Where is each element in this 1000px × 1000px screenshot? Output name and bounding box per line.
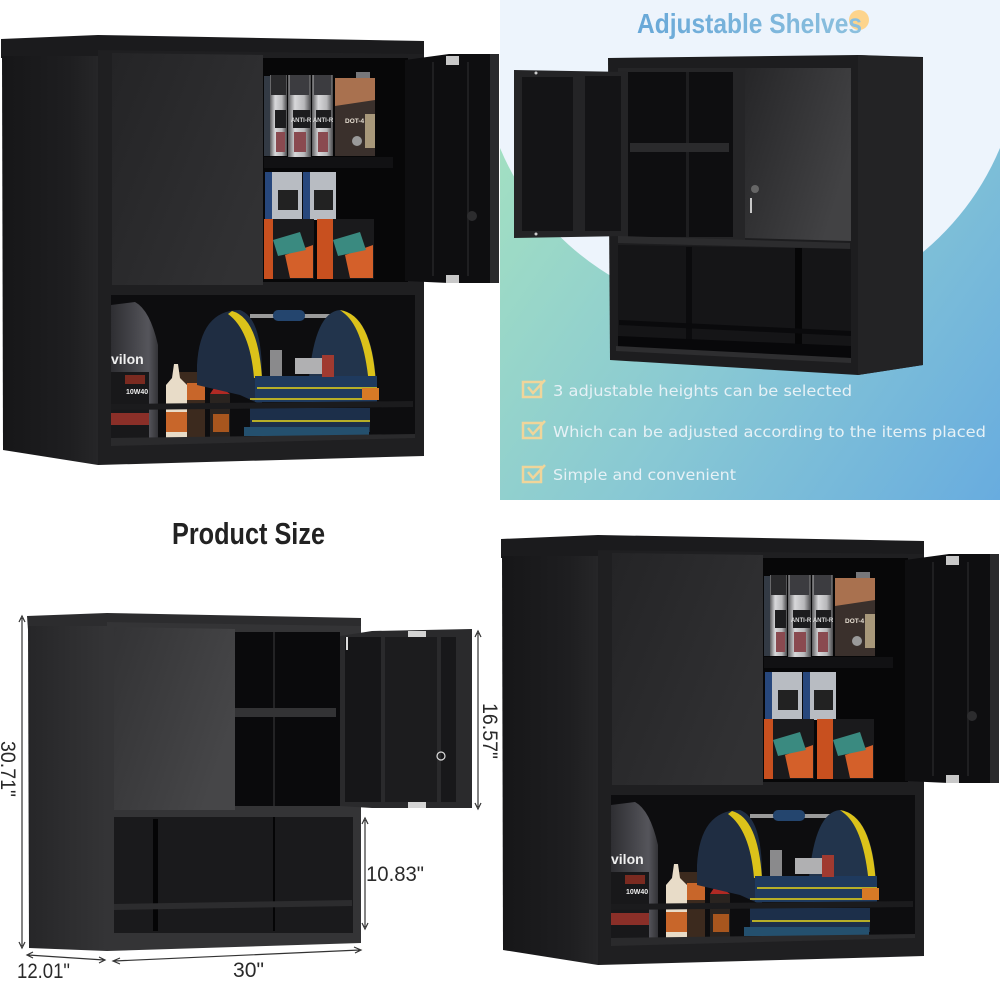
DOT-4 tin [835,572,875,656]
open upper interior [763,558,908,782]
panel: product photo with stored items, top left [1,35,499,465]
shelf [264,157,393,168]
spray cans: ANTI-R [313,118,334,124]
orange product boxes [264,219,374,279]
shelf [764,657,893,668]
spray cans: ANTI-R [291,118,312,124]
closed door [114,627,235,810]
DOT-4 tin: DOT-4 [845,618,865,625]
lower open compartment [611,795,915,938]
door lock and key [750,185,759,213]
dimension: compartment height 10.83 [362,818,424,929]
adjustable shelf [235,708,336,717]
tool bag [697,810,879,936]
dimension: depth 12.01 [17,952,105,983]
bullet 3: Simple and convenient [553,466,736,484]
front bar [114,900,352,910]
panel background [500,0,1000,500]
panel: product photo with stored items, bottom right [501,535,999,965]
small bottles [666,864,730,940]
spray cans [764,575,834,657]
spray cans: ANTI-R [791,618,812,624]
open door [340,629,472,808]
closed left door [612,553,763,785]
lower compartment [618,245,851,358]
upper shelf [630,143,729,152]
DOT-4 tin [335,72,375,156]
dimension: depth 12.01: 12.01" [17,960,70,983]
spray cans [264,75,334,157]
dimension: width 30: 30" [233,959,264,982]
stacked blue boxes [765,672,836,720]
pale circle backdrop [500,0,1000,314]
lower bar [619,320,851,336]
oil jug: 10W40 [126,389,148,396]
heading: product size: Product Size [172,516,325,551]
small bottles [166,364,230,440]
upper interior [235,632,340,806]
closed left door [112,53,263,285]
open left door [514,70,628,238]
front bar [611,901,913,910]
oil jug: vilon [111,351,144,367]
oil jug [611,802,658,938]
dimension: compartment height 10.83: 10.83" [366,863,424,886]
spray cans: ANTI-R [813,618,834,624]
feature list [523,380,986,484]
cabinet top and side [501,535,924,965]
tool bag [197,310,379,436]
dimension: door height 16.57: 16.57" [478,703,501,759]
oil jug: 10W40 [626,889,648,896]
cabinet side and top [27,613,361,951]
orange product boxes [764,719,874,779]
bullet 2: Which can be adjusted according to the items placed [553,423,986,441]
lower compartment [114,817,353,933]
front bar [111,401,413,410]
dimension: door height 16.57 [475,631,501,809]
accent dot [849,10,869,30]
heading: Adjustable Shelves [637,8,862,39]
lower lip [611,934,915,946]
stacked blue boxes [265,172,336,220]
cabinet top and side [1,35,424,465]
panel: adjustable shelves [500,0,1000,500]
dimension: height 30.71 [0,616,25,948]
cabinet with open left door [514,55,923,375]
open right door [405,54,499,283]
middle ledge [618,236,850,249]
oil jug [111,302,158,438]
closed right door [745,68,851,241]
open upper interior [263,58,408,282]
dimension: width 30 [113,947,361,982]
lower open compartment [111,295,415,438]
lower lip [111,434,415,446]
DOT-4 tin: DOT-4 [345,118,365,125]
oil jug: vilon [611,851,644,867]
panel: dimension diagram [0,613,501,983]
open right door [905,554,999,783]
bullet 1: 3 adjustable heights can be selected [553,382,852,400]
